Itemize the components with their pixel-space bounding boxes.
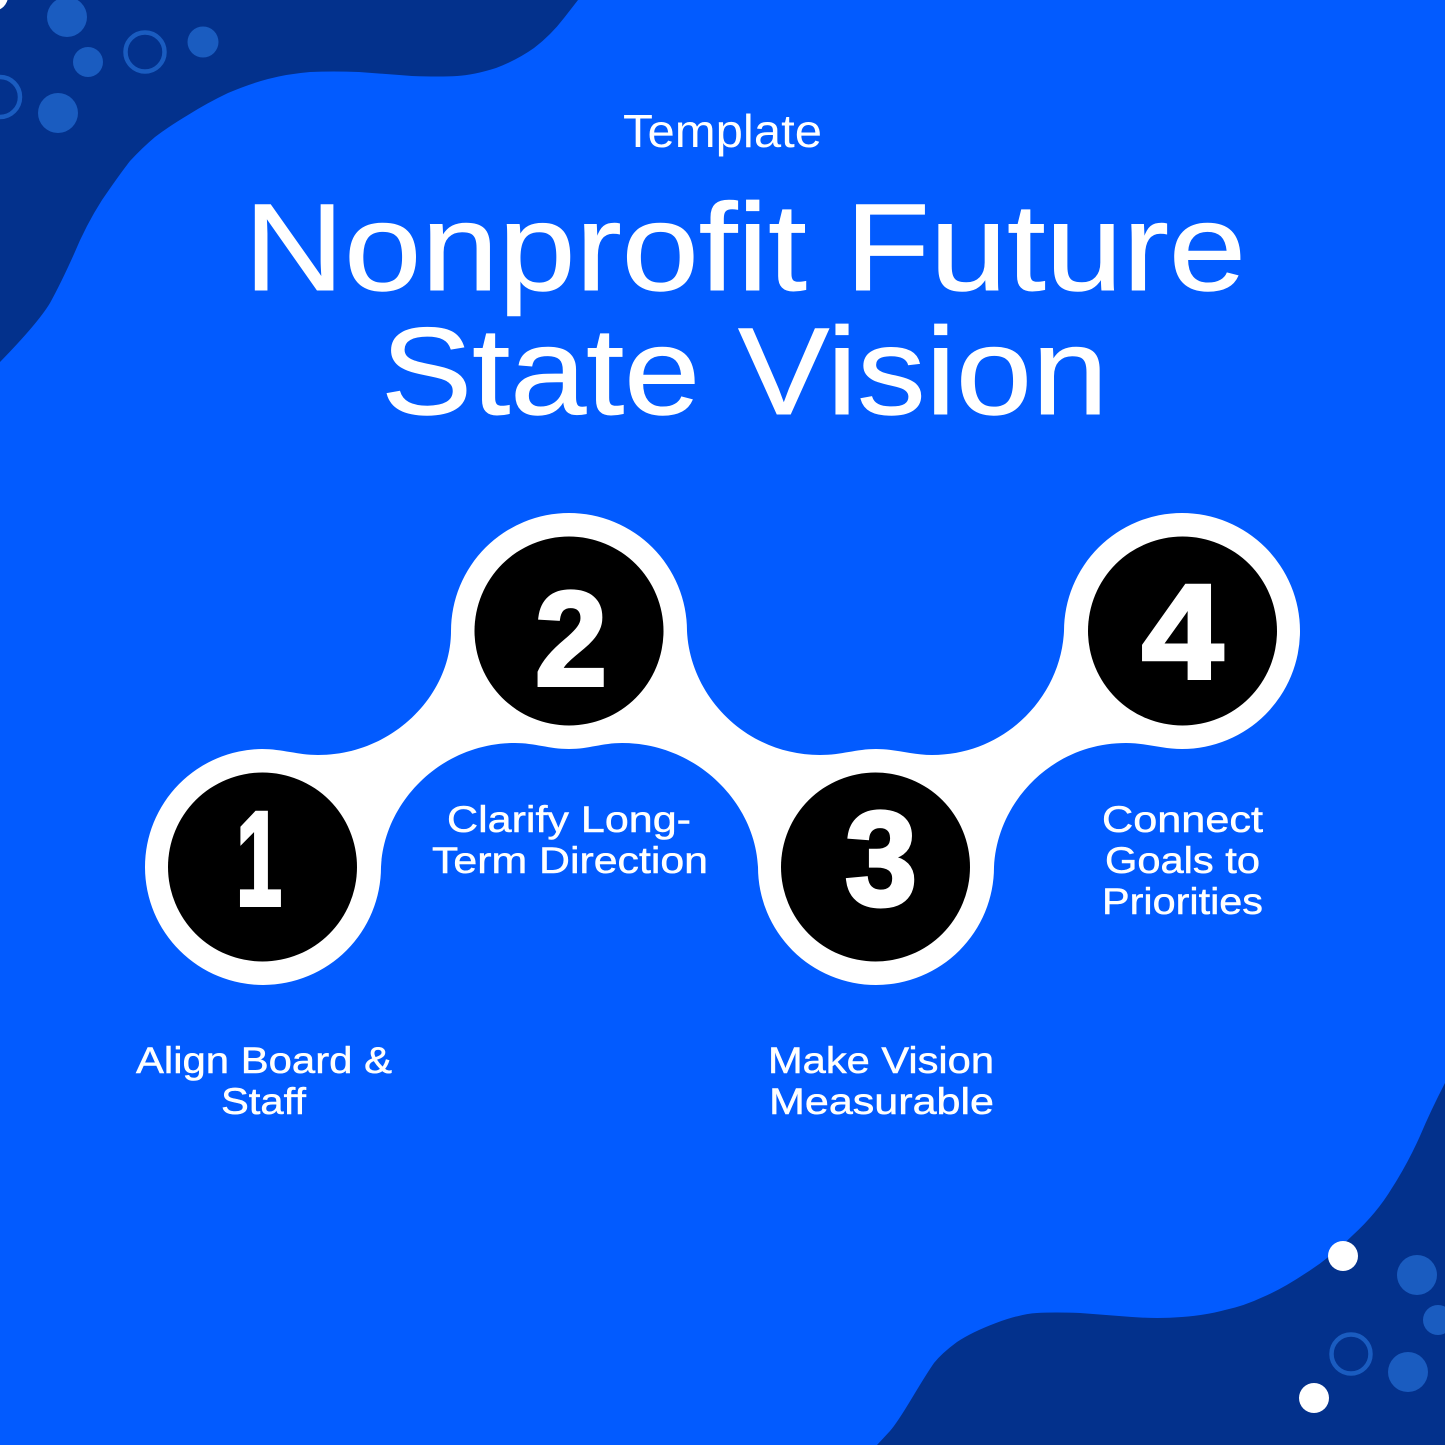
step 3 badge (781, 772, 970, 962)
title (244, 179, 1246, 441)
step 4 badge (1088, 536, 1277, 726)
white connector path (145, 513, 1300, 985)
label: step 2: Term Direction (432, 840, 708, 881)
label: step 4: Connect (1102, 799, 1264, 840)
bottom-right corner decoration (877, 1083, 1445, 1445)
label: step 2: Clarify Long- (447, 799, 691, 840)
label: step 1: Align Board & (136, 1040, 392, 1081)
step 2 badge (474, 536, 664, 726)
label: step 4: Priorities (1102, 881, 1263, 922)
label: step 3: Measurable (769, 1081, 994, 1122)
label: step 4 (1102, 799, 1264, 922)
step 1 badge (168, 772, 357, 962)
label: step 3 (768, 1040, 994, 1122)
step 4 badge: 4 (1142, 558, 1223, 707)
step 2 badge: 2 (535, 565, 607, 714)
top-left corner decoration (0, 0, 578, 362)
title: Nonprofit Future (244, 179, 1246, 317)
label: step 3: Make Vision (768, 1040, 994, 1081)
step 1 badge: 1 (236, 785, 282, 934)
label: step 2 (432, 799, 708, 881)
subtitle: Template (623, 105, 822, 157)
title: State Vision (381, 303, 1108, 441)
label: step 1: Staff (221, 1081, 307, 1122)
label: step 4: Goals to (1105, 840, 1260, 881)
step 3 badge: 3 (845, 785, 917, 934)
label: step 1 (136, 1040, 392, 1122)
